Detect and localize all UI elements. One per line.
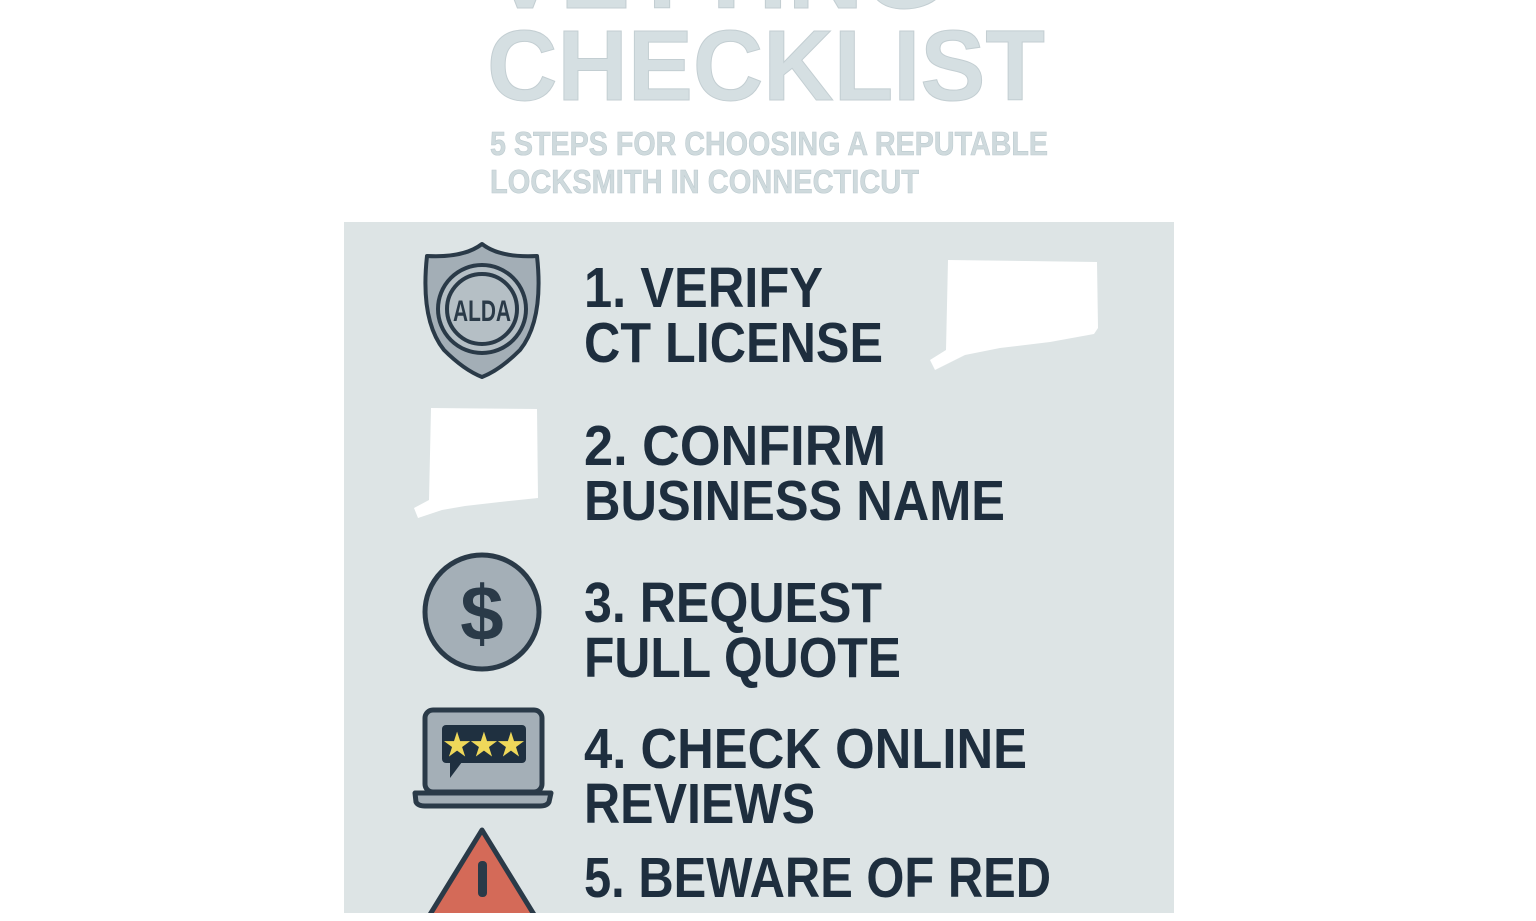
step 3: 3. REQUEST — [584, 571, 882, 635]
icon: dollar coin — [425, 555, 539, 669]
step 1: CT LICENSE — [584, 311, 883, 375]
step 4: REVIEWS — [584, 772, 815, 836]
icon: warning triangle — [426, 830, 538, 921]
step 2: 2. CONFIRM — [584, 414, 886, 478]
icon: laptop with review stars — [415, 710, 551, 806]
icon: laptop with review stars: ★★★ — [444, 729, 524, 762]
step 5: 5. BEWARE OF RED — [584, 846, 1051, 910]
step 3: FULL QUOTE — [584, 626, 901, 690]
icon: ALDA shield: ALDA — [453, 295, 511, 328]
step 4: 4. CHECK ONLINE — [584, 717, 1027, 781]
step 3 — [584, 571, 901, 690]
icon: dollar coin: $ — [460, 569, 504, 657]
icon: ALDA shield — [425, 244, 539, 377]
step 1: 1. VERIFY — [584, 256, 823, 320]
panel: checklist — [344, 222, 1174, 921]
icon: CT map white right — [930, 260, 1098, 370]
step 2: BUSINESS NAME — [584, 469, 1005, 533]
subtitle — [490, 125, 1048, 200]
subtitle: LOCKSMITH IN CONNECTICUT — [490, 163, 919, 200]
step 4 — [584, 717, 1027, 836]
title: CHECKLIST — [487, 10, 1045, 122]
text: steps — [584, 256, 1051, 910]
step 1 — [584, 256, 883, 375]
step 2 — [584, 414, 1005, 533]
icon: CT map white left — [414, 408, 538, 518]
subtitle: 5 STEPS FOR CHOOSING A REPUTABLE — [490, 125, 1048, 162]
